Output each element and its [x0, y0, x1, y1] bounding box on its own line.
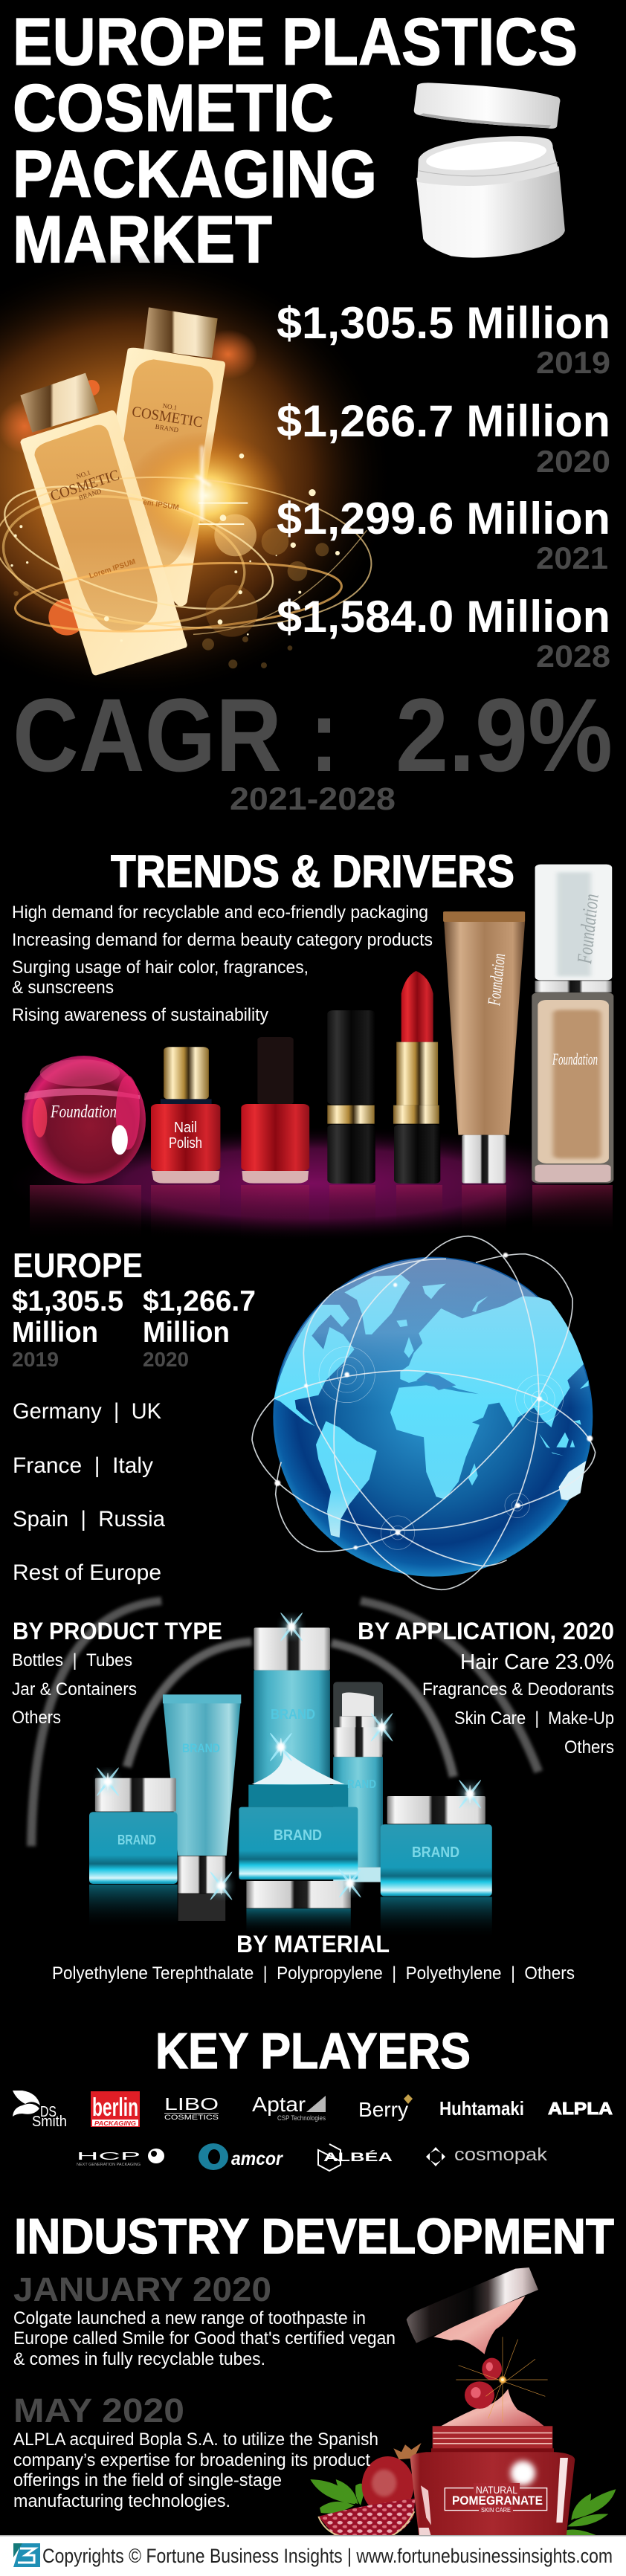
- bottle labels: NO.1: [162, 402, 178, 412]
- sparkles: [96, 1612, 482, 1901]
- value 2019: $1,305.5: [12, 1285, 123, 1317]
- panel: by product type: Jar & Containers: [12, 1679, 137, 1699]
- panel: europe values: EUROPE: [13, 1246, 143, 1285]
- development: may 2020: ALPLA acquired Bopla S.A. to utilize the Spanish: [13, 2430, 378, 2450]
- product labels: Foundation: [50, 1103, 117, 1122]
- left jar: [89, 1778, 178, 1884]
- bottle labels: COSMETIC: [48, 467, 121, 505]
- logo: HCP: [77, 2149, 164, 2167]
- center jar with cream: [239, 1749, 358, 1908]
- logo: Cosmopak: [426, 2145, 548, 2166]
- logo: Libo Cosmetics: [164, 2094, 219, 2121]
- logo: Amcor: [199, 2143, 283, 2170]
- title: EUROPE PLASTICS: [13, 5, 578, 80]
- bokeh circles: [13, 528, 329, 668]
- panel: europe values: [12, 1246, 256, 1371]
- CAGR: CAGR: [13, 677, 282, 793]
- right jar: [381, 1796, 492, 1897]
- floor reflections: [30, 1185, 613, 1242]
- logo: Huhtamaki: Huhtamaki: [439, 2097, 524, 2120]
- jar label: NATURAL: [476, 2484, 517, 2496]
- compact: [22, 1056, 146, 1184]
- lid and dripping cream: [407, 2267, 538, 2354]
- jar label: [452, 2483, 543, 2514]
- panel: by material: BY MATERIAL: [236, 1931, 390, 1957]
- logo: Berry: Berry: [358, 2098, 408, 2121]
- development: may 2020: offerings in the field of single-stage: [13, 2470, 282, 2491]
- bottle labels: BRAND: [155, 423, 179, 434]
- logo: Albea: ALBÉA: [323, 2150, 393, 2164]
- panel: by product type: Others: [12, 1708, 61, 1728]
- jar body: [410, 2426, 575, 2537]
- logo: DS Smith: Smith: [32, 2114, 67, 2130]
- back bottle: [117, 307, 225, 606]
- logo: DS Smith: DS: [40, 2104, 57, 2120]
- market value: 2028: [277, 592, 610, 674]
- reflections: [89, 1885, 492, 1939]
- footer: [0, 2535, 626, 2576]
- icon: globe: [252, 1236, 596, 1589]
- text block: trends list: [12, 903, 433, 1025]
- market value: 2021: $1,299.6 Million: [277, 494, 610, 543]
- panel: by material: [52, 1931, 575, 1983]
- development: january 2020: Europe called Smile for Good that's certified vegan: [13, 2328, 396, 2349]
- brand labels: RAND: [347, 1778, 376, 1791]
- leaves and fruit: [310, 2443, 616, 2536]
- light sparks: [10, 453, 340, 642]
- value 2019: Million: [12, 1317, 98, 1349]
- development: may 2020: company’s expertise for broadening its product: [13, 2450, 370, 2470]
- logo: Alpla: ALPLA: [548, 2099, 613, 2118]
- title: COSMETIC: [13, 71, 334, 146]
- value 2020: Million: [143, 1317, 230, 1349]
- market value: 2028: 2028: [536, 639, 610, 674]
- icon: Fortune Business Insights logo: [13, 2543, 40, 2567]
- product labels: Foundation: [573, 893, 604, 965]
- logo: Amcor: amcor: [231, 2149, 283, 2169]
- panel: by application: BY APPLICATION, 2020: [358, 1618, 614, 1644]
- text block: trends list: High demand for recyclable and eco-friendly packaging: [12, 903, 428, 923]
- brand labels: BRAND: [412, 1844, 459, 1861]
- red lipstick: [393, 971, 440, 1184]
- panel: by product type: [12, 1618, 222, 1728]
- orbit light swirls: [0, 446, 376, 641]
- logo: Libo Cosmetics: COSMETICS: [164, 2114, 219, 2121]
- text block: countries: Spain | Russia: [13, 1507, 165, 1531]
- seeds and swirl: [441, 2337, 548, 2426]
- glints: [274, 1253, 593, 1549]
- market value: 2021: [277, 494, 610, 575]
- panel: by product type: BY PRODUCT TYPE: [13, 1618, 222, 1644]
- tall bottle: [254, 1627, 330, 1789]
- development: january 2020: & comes in fully recyclable tubes.: [13, 2349, 265, 2369]
- brand labels: BRAND: [182, 1741, 220, 1755]
- bottle labels: em IPSUM: [142, 498, 179, 512]
- market value: 2019: $1,305.5 Million: [277, 298, 610, 348]
- logo: HCP: HCP: [77, 2150, 141, 2163]
- panel: by application: [358, 1618, 614, 1757]
- bottle labels: BRAND: [78, 487, 103, 502]
- panel: by material: Polyethylene Terephthalate | Polypropylene | Polyethylene | Others: [52, 1963, 575, 1983]
- title: [13, 5, 578, 277]
- panel: by application: Skin Care | Make-Up: [454, 1708, 614, 1728]
- logo: Aptar: CSP Technologies: [277, 2114, 326, 2122]
- front bottle: [20, 373, 187, 675]
- bottle labels: NO.1: [75, 468, 91, 480]
- brand labels: BRAND: [274, 1827, 322, 1844]
- value 2019: 2019: [12, 1348, 59, 1371]
- orange orbs: [0, 329, 258, 636]
- logo: Libo Cosmetics: LIBO: [164, 2094, 219, 2114]
- product labels: Foundation: [485, 952, 509, 1007]
- market value: 2019: 2019: [536, 345, 610, 380]
- market value: 2021: 2021: [536, 540, 608, 575]
- beige tube: [443, 911, 525, 1184]
- floor glow: [0, 1126, 625, 1242]
- text block: trends list: Increasing demand for derma beauty category products: [12, 930, 433, 950]
- logo: HCP: NEXT GENERATION PACKAGING: [77, 2163, 141, 2167]
- continents: [274, 1275, 589, 1537]
- development: may 2020: [13, 2392, 378, 2511]
- logo: Aptar: [252, 2093, 326, 2122]
- nail polish two: [241, 1037, 309, 1184]
- signal ripples: [319, 1346, 564, 1549]
- text block: countries: Germany | UK: [13, 1399, 161, 1424]
- text block: trends list: & sunscreens: [12, 978, 114, 998]
- logo: Albea: [318, 2144, 393, 2171]
- orbit lines: [252, 1236, 596, 1589]
- text block: countries: France | Italy: [13, 1453, 153, 1478]
- development: may 2020: MAY 2020: [13, 2392, 184, 2430]
- title: PACKAGING: [13, 138, 377, 212]
- product labels: [50, 893, 604, 1152]
- bottle labels: [48, 402, 204, 581]
- logo: DS Smith: [13, 2091, 67, 2130]
- development: january 2020: [13, 2270, 396, 2369]
- jar label: POMEGRANATE: [452, 2493, 543, 2508]
- text block: trends list: Rising awareness of sustainability: [12, 1005, 268, 1025]
- background arcs: [31, 1601, 538, 1846]
- tube: [163, 1694, 241, 1894]
- light core: [124, 431, 288, 560]
- CAGR: 2021-2028: [230, 781, 396, 817]
- icon: white cream jar: [414, 83, 565, 258]
- market value: 2020: $1,266.7 Million: [277, 396, 610, 446]
- pump bottle: [333, 1682, 383, 1882]
- value 2020: [143, 1285, 256, 1371]
- market value: 2020: [277, 396, 610, 479]
- CAGR: 2.9%: [396, 677, 613, 793]
- logo: Cosmopak: cosmopak: [454, 2145, 548, 2165]
- nail polish one: [151, 1047, 220, 1184]
- bottle labels: COSMETIC: [131, 404, 204, 430]
- development: january 2020: Colgate launched a new range of toothpaste in: [13, 2308, 366, 2328]
- logo: Aptar: Aptar: [252, 2093, 306, 2116]
- market value: 2019: [277, 298, 610, 380]
- CAGR: [13, 677, 613, 817]
- market value: 2028: $1,584.0 Million: [277, 592, 610, 642]
- panel: by application: Others: [564, 1737, 614, 1757]
- product labels: Nail: [174, 1120, 197, 1136]
- development: january 2020: JANUARY 2020: [13, 2270, 271, 2308]
- title: MARKET: [13, 203, 272, 277]
- brand labels: BRAND: [271, 1707, 315, 1722]
- value 2020: 2020: [143, 1348, 189, 1371]
- panel: by application: Hair Care 23.0%: [460, 1650, 614, 1674]
- illustration: teal skincare products: [31, 1601, 538, 1939]
- heading: key players: KEY PLAYERS: [155, 2023, 471, 2079]
- brand labels: [117, 1707, 459, 1861]
- logo: Berlin Packaging: [91, 2091, 140, 2127]
- market value: 2020: 2020: [536, 444, 610, 479]
- logo: Berlin Packaging: PACKAGING: [94, 2120, 136, 2127]
- illustration: pomegranate cream jar: [310, 2267, 616, 2537]
- CAGR: :: [310, 677, 338, 793]
- jar label: SKIN CARE: [481, 2507, 511, 2514]
- panel: by product type: Bottles | Tubes: [12, 1650, 132, 1670]
- value 2019: [12, 1285, 123, 1371]
- black lipstick: [327, 1010, 375, 1184]
- heading: trends and drivers: TRENDS & DRIVERS: [111, 846, 514, 897]
- foundation bottle: [532, 865, 613, 1184]
- text block: trends list: Surging usage of hair color, fragrances,: [12, 958, 309, 978]
- illustration: golden cosmetic bottles: [0, 253, 394, 699]
- panel: by application: Fragrances & Deodorants: [422, 1679, 614, 1699]
- text block: countries: Rest of Europe: [13, 1560, 161, 1585]
- development: may 2020: manufacturing technologies.: [13, 2491, 230, 2511]
- text block: countries: [13, 1399, 165, 1585]
- illustration: makeup products: [0, 865, 625, 1242]
- brand labels: BRAND: [117, 1833, 156, 1847]
- product labels: Polish: [169, 1135, 202, 1152]
- value 2020: $1,266.7: [143, 1285, 256, 1317]
- bottle labels: Lorem IPSUM: [88, 558, 137, 581]
- logo: Berlin Packaging: berlin: [92, 2094, 138, 2122]
- key player logos: [13, 2091, 613, 2171]
